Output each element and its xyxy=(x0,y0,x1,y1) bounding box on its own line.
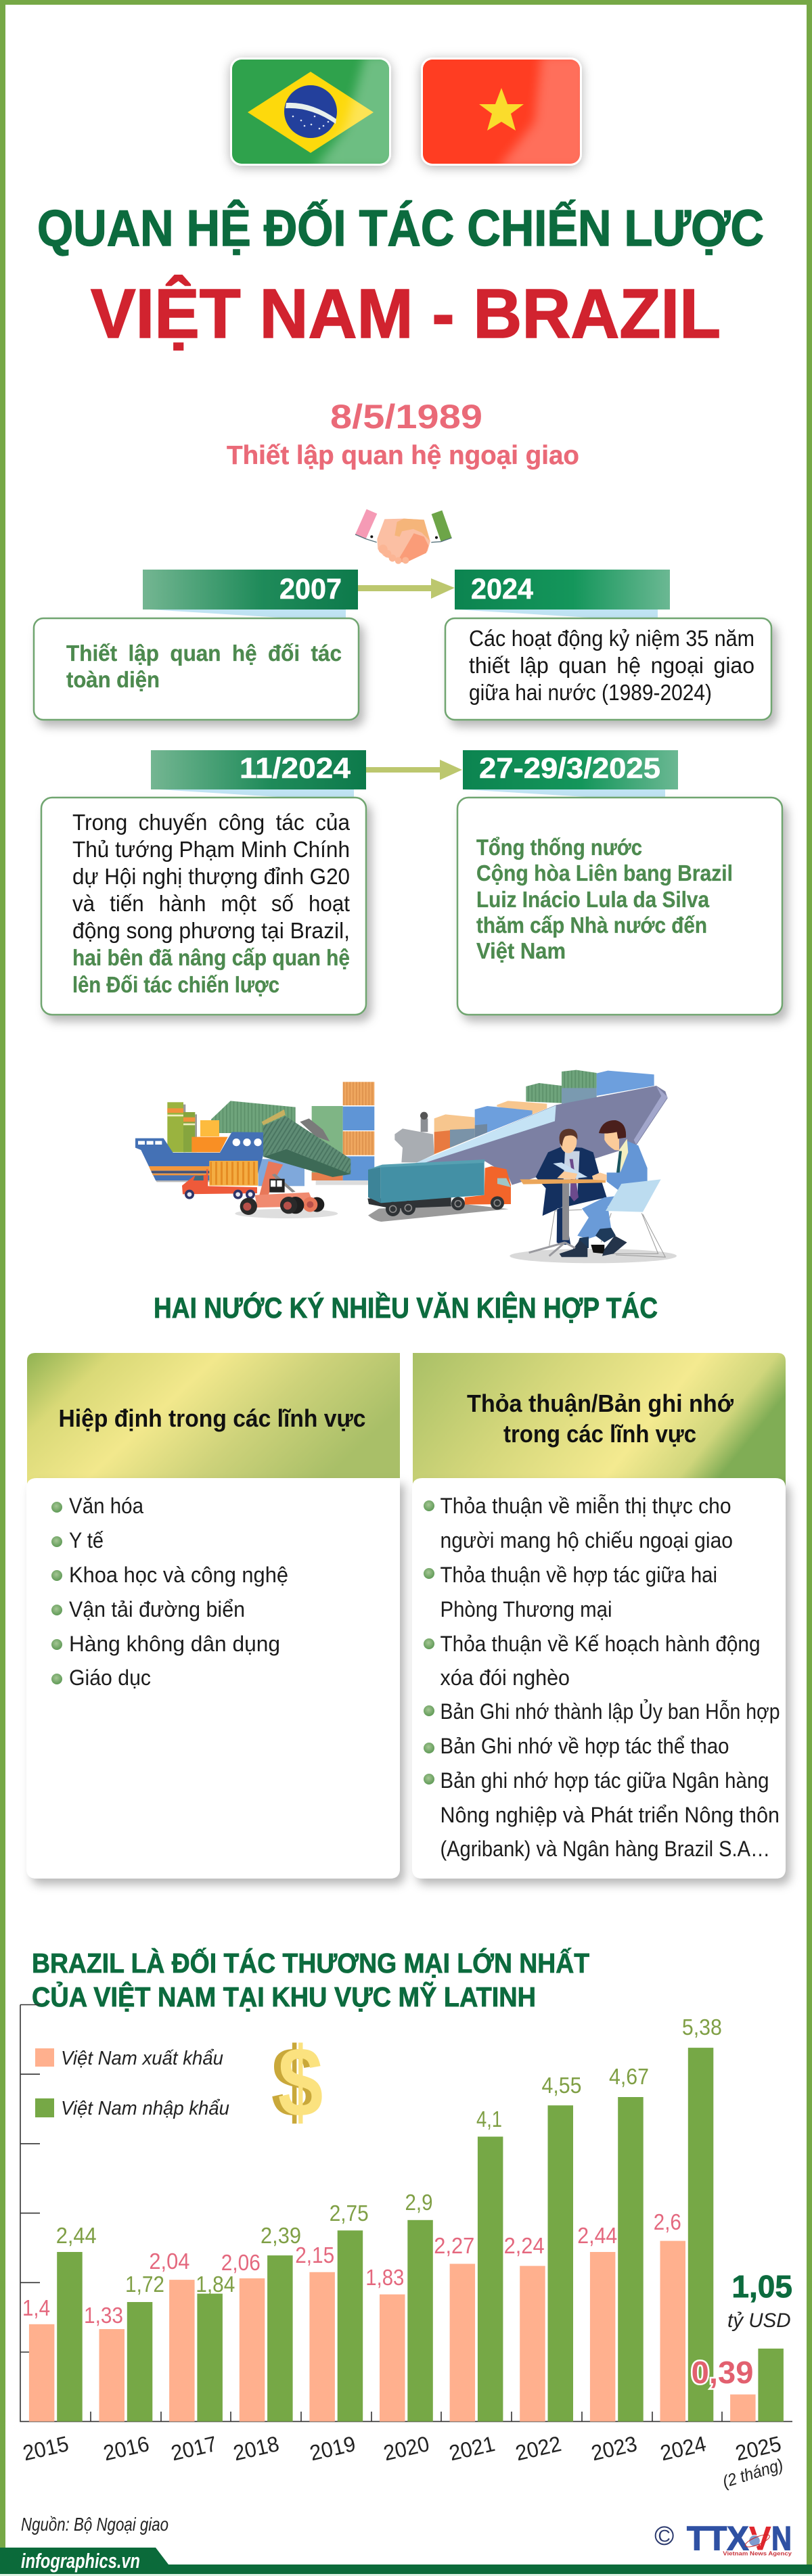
export value labels: 2,06 xyxy=(221,2250,261,2275)
logo: TTXVN: V xyxy=(749,2519,771,2557)
panel body: MoUs list: Thỏa thuận về miễn thị thực cho xyxy=(440,1494,731,1518)
chart heading: BRAZIL LÀ ĐỐI TÁC THƯƠNG MẠI LỚN NHẤT xyxy=(32,1948,589,1979)
panel: agreements xyxy=(26,1353,400,1879)
card 11/2024: động song phương tại Brazil, xyxy=(72,918,350,943)
import value labels xyxy=(56,2015,722,2297)
panel body: MoUs list: Bản Ghi nhớ thành lập Ủy ban Hỗn hợp xyxy=(440,1699,780,1724)
footer pale strip xyxy=(0,2574,812,2576)
timeline row 1 xyxy=(34,570,771,720)
panel header: agreements xyxy=(27,1353,400,1492)
year labels: 2025 xyxy=(733,2431,784,2465)
highlighted 2025 export value: 0,39 xyxy=(692,2355,754,2390)
card 11/2024 xyxy=(41,798,366,1015)
logo: TTXVN xyxy=(656,2519,792,2557)
legend: import: Việt Nam nhập khẩu xyxy=(61,2098,229,2119)
shadow wedge 27-29/3/2025 xyxy=(463,789,665,802)
footer xyxy=(0,2548,812,2576)
export value labels: 2,24 xyxy=(504,2233,545,2258)
year labels: 2018 xyxy=(231,2431,281,2465)
card 2024: Các hoạt động kỷ niệm 35 năm xyxy=(469,626,754,651)
import value labels: 4,55 xyxy=(541,2073,582,2098)
date bar 2007: 2007 xyxy=(279,573,342,605)
date caption: Thiết lập quan hệ ngoại giao xyxy=(227,441,579,470)
import value labels: 2,44 xyxy=(56,2223,97,2248)
arrow xyxy=(358,578,455,599)
panel body: agreements list: Văn hóa xyxy=(69,1494,143,1518)
title xyxy=(37,200,764,352)
year labels: 2024 xyxy=(658,2431,708,2465)
export value labels: 1,4 xyxy=(22,2295,50,2320)
logo: TTXVN: C xyxy=(658,2527,671,2546)
export value labels: 2,04 xyxy=(149,2249,189,2274)
shadow wedge 2024 xyxy=(455,610,658,622)
legend: export: Việt Nam xuất khẩu xyxy=(61,2048,223,2069)
panel body: agreements list: Y tế xyxy=(69,1528,104,1552)
shadow wedge 11/2024 xyxy=(158,789,354,802)
export value labels: 1,33 xyxy=(84,2303,123,2328)
card 2007: Thiết lập quan hệ đối tác xyxy=(66,641,342,666)
shadow wedge 2007 xyxy=(150,610,346,622)
export value labels: 2,44 xyxy=(577,2223,617,2248)
panel header: agreements: Hiệp định trong các lĩnh vực xyxy=(58,1404,365,1432)
panel body: MoUs list: xóa đói nghèo xyxy=(440,1665,570,1690)
year labels xyxy=(20,2431,784,2465)
export value labels: 1,83 xyxy=(365,2265,404,2290)
logo: TTXVN: TTX xyxy=(687,2519,749,2557)
panel header: MoUs xyxy=(413,1353,786,1492)
card 2007: toàn diện xyxy=(66,667,160,692)
card 27-29/3/2025: Cộng hòa Liên bang Brazil xyxy=(476,860,733,886)
card 11/2024: và tiến hành một số hoạt xyxy=(72,891,350,916)
logo: TTXVN: Vietnam News Agency xyxy=(723,2550,792,2557)
panel body: MoUs list: Thỏa thuận về Kế hoạch hành động xyxy=(440,1632,761,1656)
year labels: 2017 xyxy=(168,2431,219,2465)
card 11/2024: lên Đối tác chiến lược xyxy=(72,972,279,997)
date bar 11/2024 xyxy=(151,750,366,789)
unit label: tỷ USD xyxy=(727,2309,791,2332)
card 27-29/3/2025: Luiz Inácio Lula da Silva xyxy=(476,887,710,912)
title line 1: QUAN HỆ ĐỐI TÁC CHIẾN LƯỢC xyxy=(37,200,764,256)
icon: gold dollar sign: $ xyxy=(278,2027,323,2138)
panel body: agreements list: Hàng không dân dụng xyxy=(69,1632,280,1656)
2025 note: (2 tháng) xyxy=(721,2456,786,2491)
panel body: agreements list: Khoa học và công nghệ xyxy=(69,1563,288,1587)
panel body: MoUs list: (Agribank) và Ngân hàng Brazil S.A… xyxy=(440,1837,770,1861)
export value labels: 2,15 xyxy=(295,2242,334,2268)
footer site name: infographics.vn xyxy=(21,2549,140,2573)
panel body: MoUs list: Thỏa thuận về hợp tác giữa hai xyxy=(440,1563,717,1587)
date heading: 8/5/1989 xyxy=(330,398,482,436)
export value labels: 2,6 xyxy=(654,2209,681,2234)
illustration: port, cargo ship and forklift xyxy=(135,1082,374,1218)
export bars xyxy=(29,2241,756,2422)
card 11/2024: hai bên đã nâng cấp quan hệ xyxy=(72,945,350,970)
logo: TTXVN: N xyxy=(771,2519,792,2557)
year labels: 2019 xyxy=(307,2431,358,2465)
import value labels: 4,67 xyxy=(609,2064,649,2089)
card 27-29/3/2025: Tổng thống nước xyxy=(476,835,642,860)
year labels: 2016 xyxy=(101,2431,152,2465)
year labels: 2021 xyxy=(447,2431,497,2465)
icon: gold dollar sign: $ xyxy=(271,2027,317,2138)
card 27-29/3/2025 xyxy=(457,798,782,1015)
chart heading: CỦA VIỆT NAM TẠI KHU VỰC MỸ LATINH xyxy=(32,1981,536,2013)
panel body: MoUs list: người mang hộ chiếu ngoại giao xyxy=(440,1528,733,1552)
export value labels: 2,27 xyxy=(434,2233,474,2258)
import value labels: 1,72 xyxy=(125,2272,164,2297)
card 2007 xyxy=(34,618,359,720)
illustration: port logistics and business meeting xyxy=(135,1070,677,1263)
title line 2: VIỆT NAM - BRAZIL xyxy=(91,275,721,352)
import value labels: 1,84 xyxy=(196,2272,235,2297)
timeline row 2 xyxy=(41,750,782,1015)
year labels: 2022 xyxy=(513,2431,564,2465)
date bar 27-29/3/2025 xyxy=(463,750,678,789)
flag: Vietnam xyxy=(423,54,589,169)
legend xyxy=(35,2048,229,2119)
import value labels: 4,1 xyxy=(476,2107,502,2132)
date bar 11/2024: 11/2024 xyxy=(240,752,351,785)
flags xyxy=(232,54,589,169)
panel: MoUs xyxy=(412,1353,786,1879)
bar chart: bilateral trade 2015-2025 xyxy=(20,2005,792,2491)
panel body: MoUs list xyxy=(412,1478,786,1879)
panel body: agreements list xyxy=(26,1478,400,1879)
illustration: truck, container ship and two businessmen xyxy=(367,1070,677,1263)
flag: Brazil xyxy=(232,54,399,169)
card 11/2024: Thủ tướng Phạm Minh Chính xyxy=(72,837,350,862)
date bar 2024 xyxy=(455,570,670,610)
date bar 27-29/3/2025: 27-29/3/2025 xyxy=(479,752,660,785)
panel body: agreements list: Giáo dục xyxy=(69,1665,151,1690)
card 2024 xyxy=(445,618,771,720)
section heading: signed documents: HAI NƯỚC KÝ NHIỀU VĂN KIỆN HỢP TÁC xyxy=(154,1291,658,1325)
year labels: 2015 xyxy=(20,2431,71,2465)
import value labels: 5,38 xyxy=(682,2015,722,2040)
card 27-29/3/2025: Việt Nam xyxy=(476,938,566,963)
import value labels: 2,9 xyxy=(405,2190,433,2215)
card 2024: thiết lập quan hệ ngoại giao xyxy=(469,653,754,678)
highlighted 2025 import value: 1,05 xyxy=(731,2269,792,2304)
panel header: MoUs: Thỏa thuận/Bản ghi nhớ xyxy=(467,1389,734,1417)
chart heading xyxy=(32,1948,589,2013)
import value labels: 2,75 xyxy=(330,2201,369,2226)
panel body: MoUs list: Bản Ghi nhớ về hợp tác thể thao xyxy=(440,1734,729,1758)
import bars xyxy=(57,2048,784,2422)
export value labels xyxy=(22,2209,681,2328)
source: Nguồn: Bộ Ngoại giao xyxy=(21,2514,168,2535)
panel body: MoUs list: Phòng Thương mại xyxy=(440,1597,612,1622)
card 11/2024: dự Hội nghị thượng đỉnh G20 xyxy=(72,864,350,889)
footer band xyxy=(0,2548,812,2574)
arrow xyxy=(366,760,462,780)
card 27-29/3/2025: thăm cấp Nhà nước đến xyxy=(476,913,707,938)
card 11/2024: Trong chuyến công tác của xyxy=(72,810,351,835)
card 2024: giữa hai nước (1989-2024) xyxy=(469,680,712,705)
year labels: 2023 xyxy=(589,2431,639,2465)
panel body: MoUs list: Nông nghiệp và Phát triển Nông thôn xyxy=(440,1803,780,1827)
import value labels: 2,39 xyxy=(261,2223,301,2248)
icon: handshake xyxy=(355,509,452,564)
date bar 2024: 2024 xyxy=(471,573,533,605)
chart axes xyxy=(20,2005,792,2422)
date bar 2007 xyxy=(143,570,358,610)
panel body: agreements list: Vận tải đường biển xyxy=(69,1597,245,1622)
panel body: MoUs list: Bản ghi nhớ hợp tác giữa Ngân hàng xyxy=(440,1768,769,1793)
year labels: 2020 xyxy=(381,2431,432,2465)
panel header: MoUs: trong các lĩnh vực xyxy=(503,1420,696,1448)
